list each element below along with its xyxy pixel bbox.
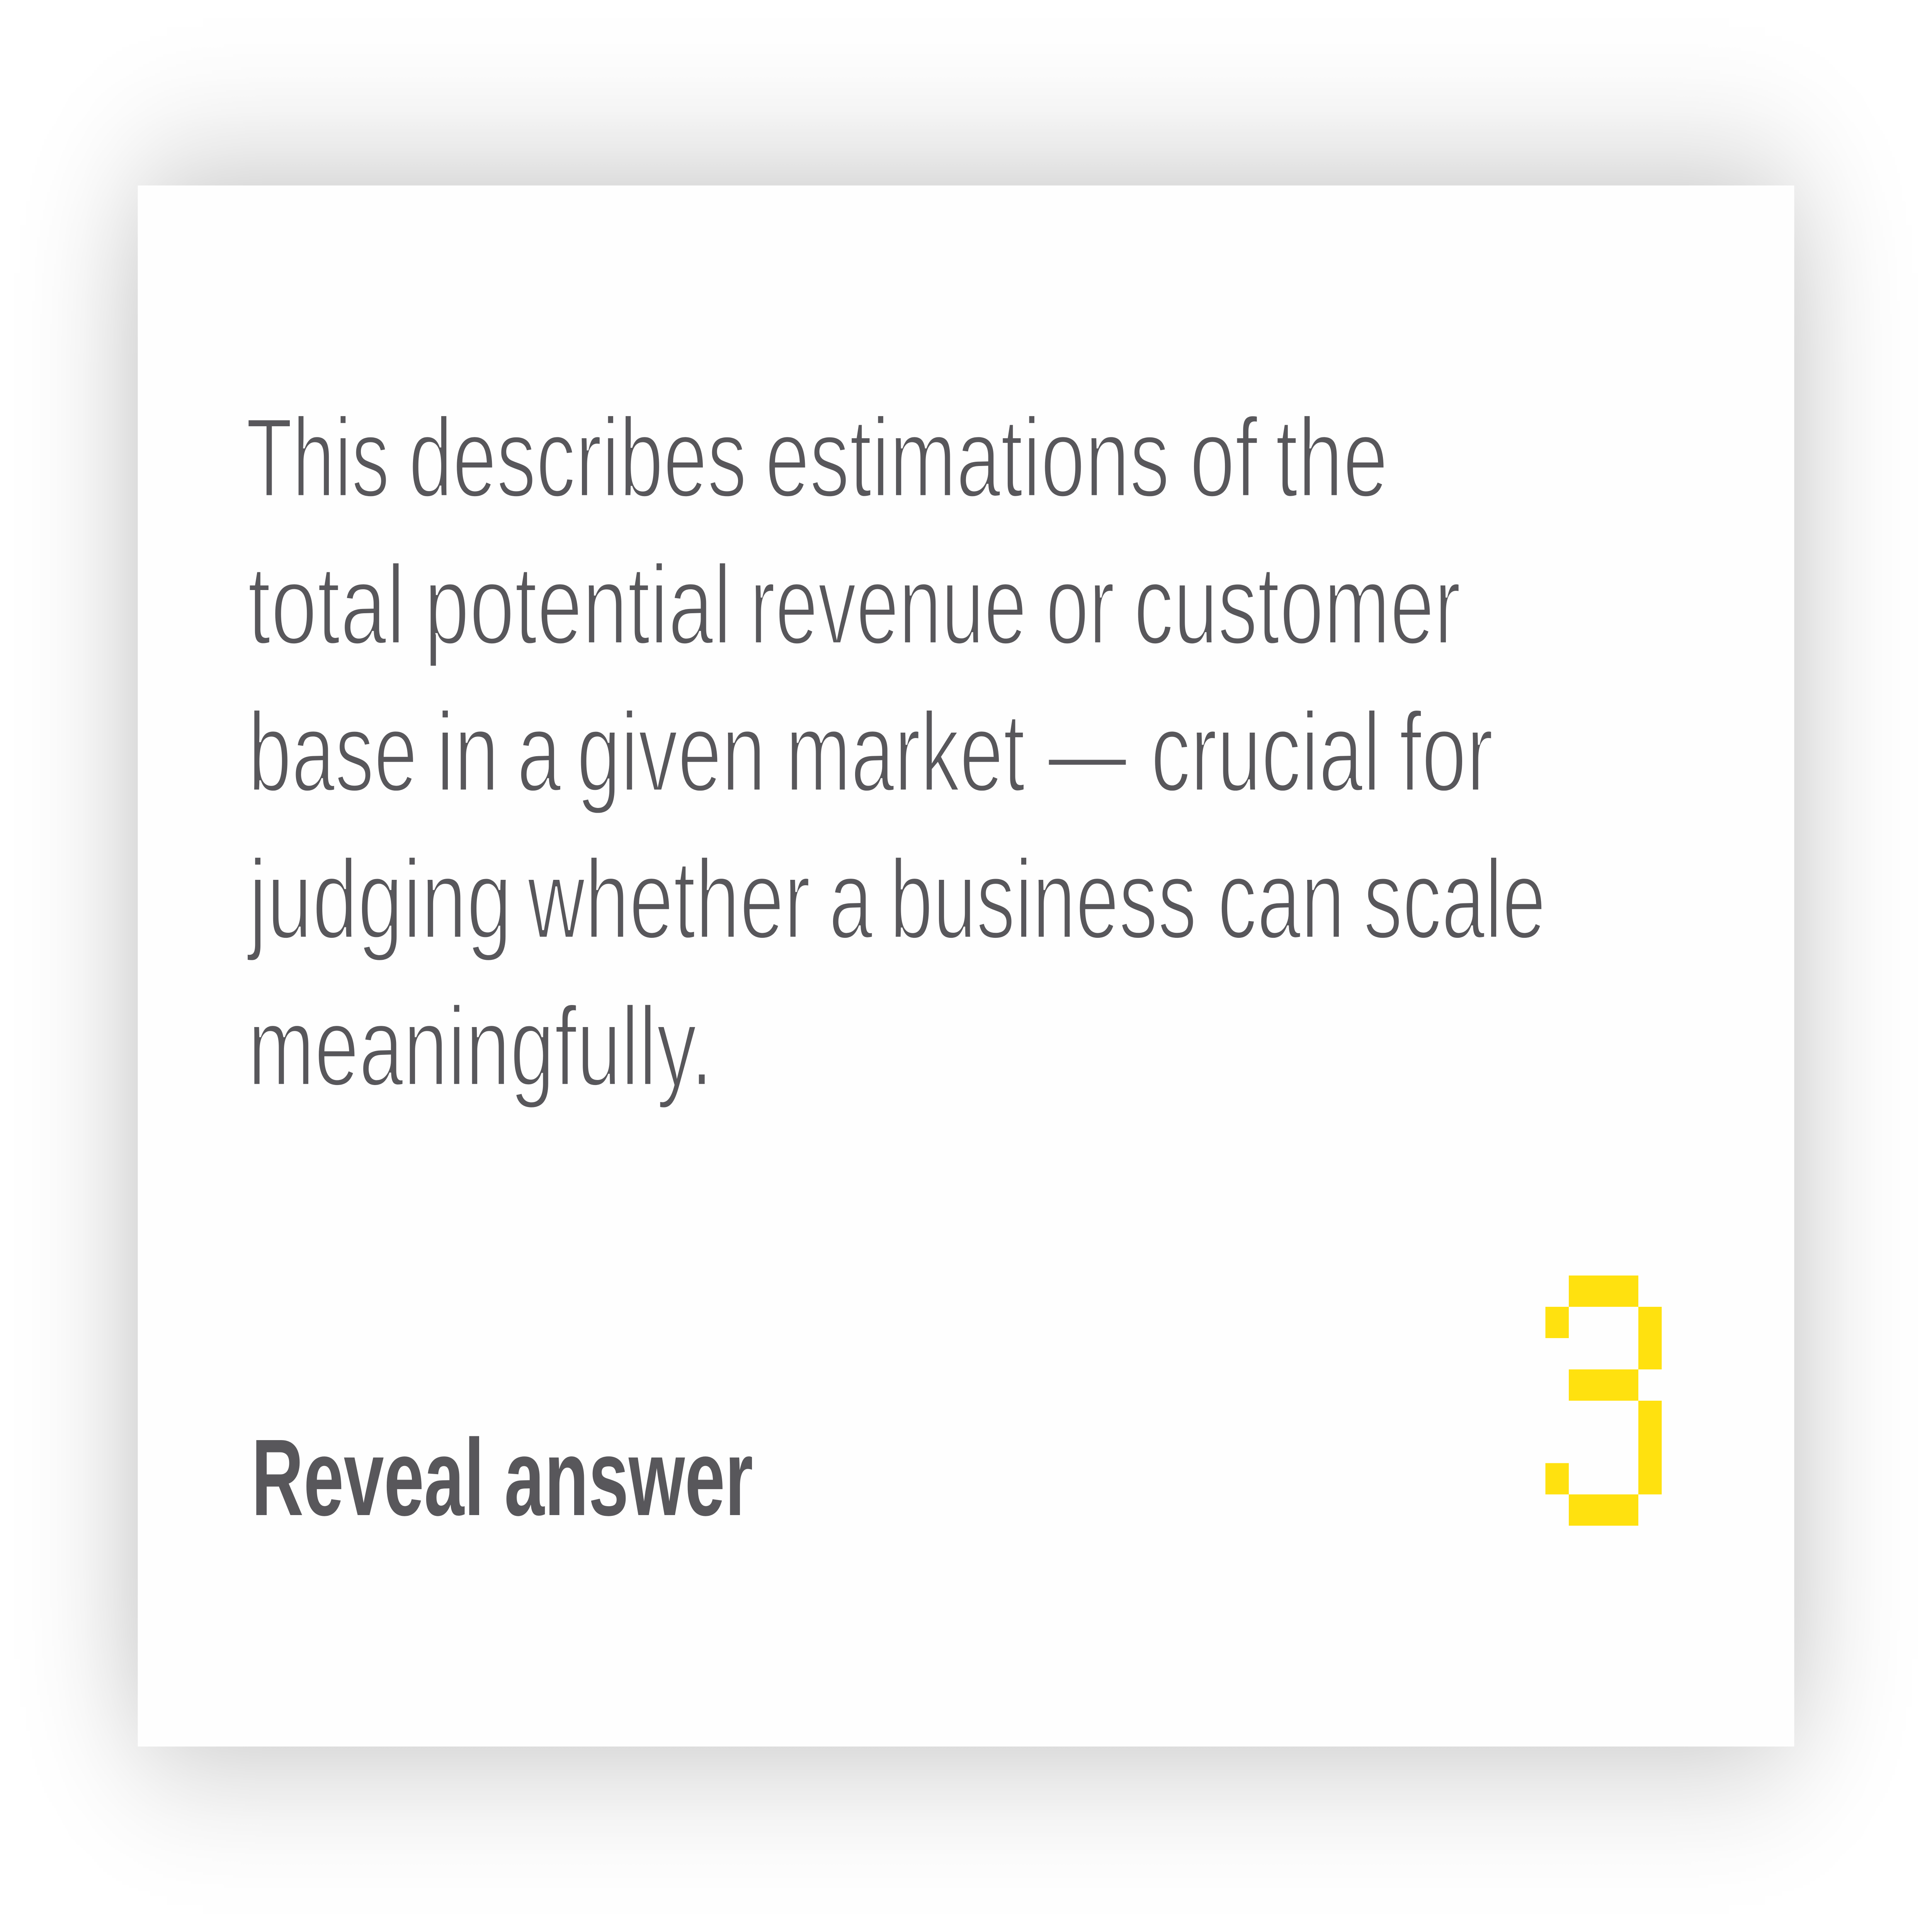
line 3: in <box>436 689 499 815</box>
line 2 <box>248 542 1461 668</box>
card background <box>138 185 1794 1747</box>
line 4: whether <box>526 837 810 962</box>
line 4: can <box>1218 837 1345 962</box>
line 4 <box>246 837 1546 963</box>
line 2: potential <box>424 542 731 668</box>
panel: question card <box>138 185 1794 1747</box>
line 2: total <box>248 542 405 668</box>
line 1 <box>246 395 1388 520</box>
line 1: estimations <box>765 395 1170 520</box>
line 1: of <box>1190 395 1258 520</box>
line 4: business <box>890 837 1197 962</box>
line 3: crucial <box>1151 689 1381 815</box>
line 3: given <box>577 689 765 815</box>
line 3: — <box>1048 689 1127 815</box>
line 1: This <box>246 395 389 520</box>
icon: pixel number 3 <box>1546 1276 1662 1526</box>
line 3: market <box>786 689 1025 815</box>
line 3: a <box>517 689 562 815</box>
line 3: for <box>1399 689 1493 815</box>
line 4: judging <box>246 837 512 963</box>
button label: reveal answer: Reveal answer <box>252 1417 753 1538</box>
line 4: a <box>829 837 873 962</box>
text block: definition <box>246 395 1546 1110</box>
line 2: customer <box>1134 542 1461 668</box>
line 2: or <box>1046 542 1115 668</box>
line 1: the <box>1276 395 1388 520</box>
line 4: scale <box>1364 837 1546 962</box>
line 2: revenue <box>750 542 1027 668</box>
line 1: describes <box>409 395 747 520</box>
line 3 <box>248 689 1493 815</box>
line 5: meaningfully. <box>248 984 713 1110</box>
line 3: base <box>248 689 417 815</box>
